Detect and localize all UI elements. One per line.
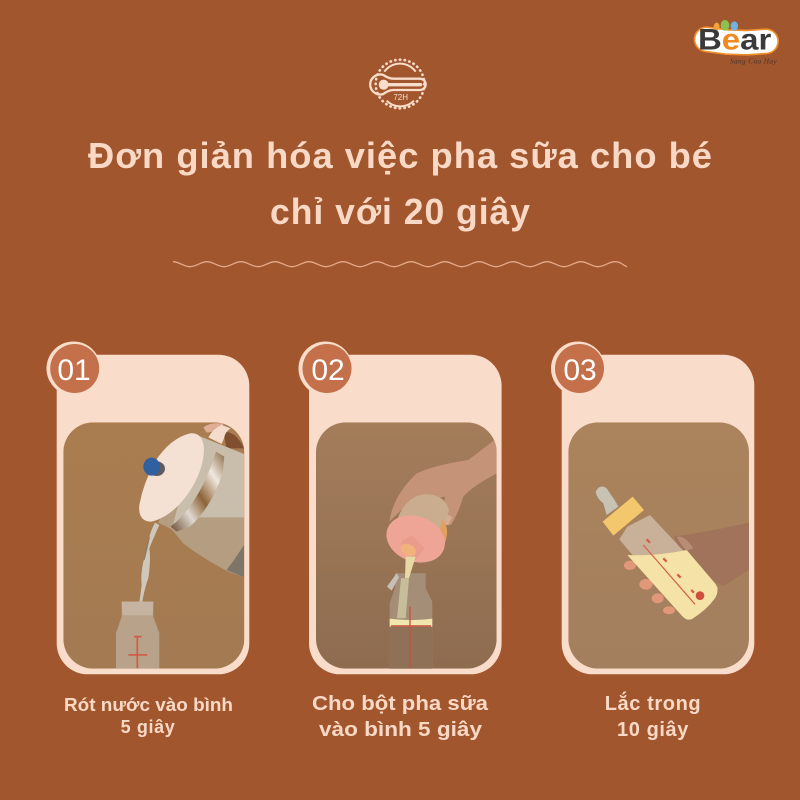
caption 3 xyxy=(605,691,701,741)
logo: Bear: Bear xyxy=(698,23,771,56)
card 1 xyxy=(57,355,249,674)
icon: thermometer 72H: 72H xyxy=(393,93,408,102)
caption 2: vào bình 5 giây xyxy=(319,719,483,741)
badge 03 xyxy=(551,342,605,396)
wavy divider xyxy=(173,262,627,267)
caption 1: Rót nước vào bình xyxy=(64,695,233,715)
caption 1 xyxy=(64,695,233,737)
badge 02 xyxy=(298,342,352,396)
caption 3: Lắc trong xyxy=(605,691,701,715)
panel: step 3 xyxy=(551,342,754,741)
photo 3: shaking the bottle xyxy=(568,422,749,669)
caption 2 xyxy=(312,693,489,741)
badge 01 xyxy=(46,342,100,396)
kettle lid xyxy=(139,433,204,522)
panel: step 2 xyxy=(298,342,502,741)
title: Đơn giản hóa việc pha sữa cho bé xyxy=(88,135,713,176)
caption 2: Cho bột pha sữa xyxy=(312,693,489,715)
title: chỉ với 20 giây xyxy=(270,191,531,232)
logo: Bear: Sang Của Hay xyxy=(730,56,777,65)
caption 1: 5 giây xyxy=(121,717,175,737)
card 2 xyxy=(309,355,502,674)
photo 1: pouring water from kettle xyxy=(63,422,244,670)
logo: Bear xyxy=(698,20,777,65)
caption 3: 10 giây xyxy=(617,719,689,741)
badge 02: 02 xyxy=(311,354,345,387)
icon: thermometer 72H xyxy=(370,60,426,108)
panel: step 1 xyxy=(46,342,249,737)
badge 01: 01 xyxy=(57,354,91,387)
photo 2: pouring milk powder xyxy=(316,422,497,670)
title xyxy=(88,135,713,232)
card 3 xyxy=(562,355,754,674)
badge 03: 03 xyxy=(563,354,597,387)
